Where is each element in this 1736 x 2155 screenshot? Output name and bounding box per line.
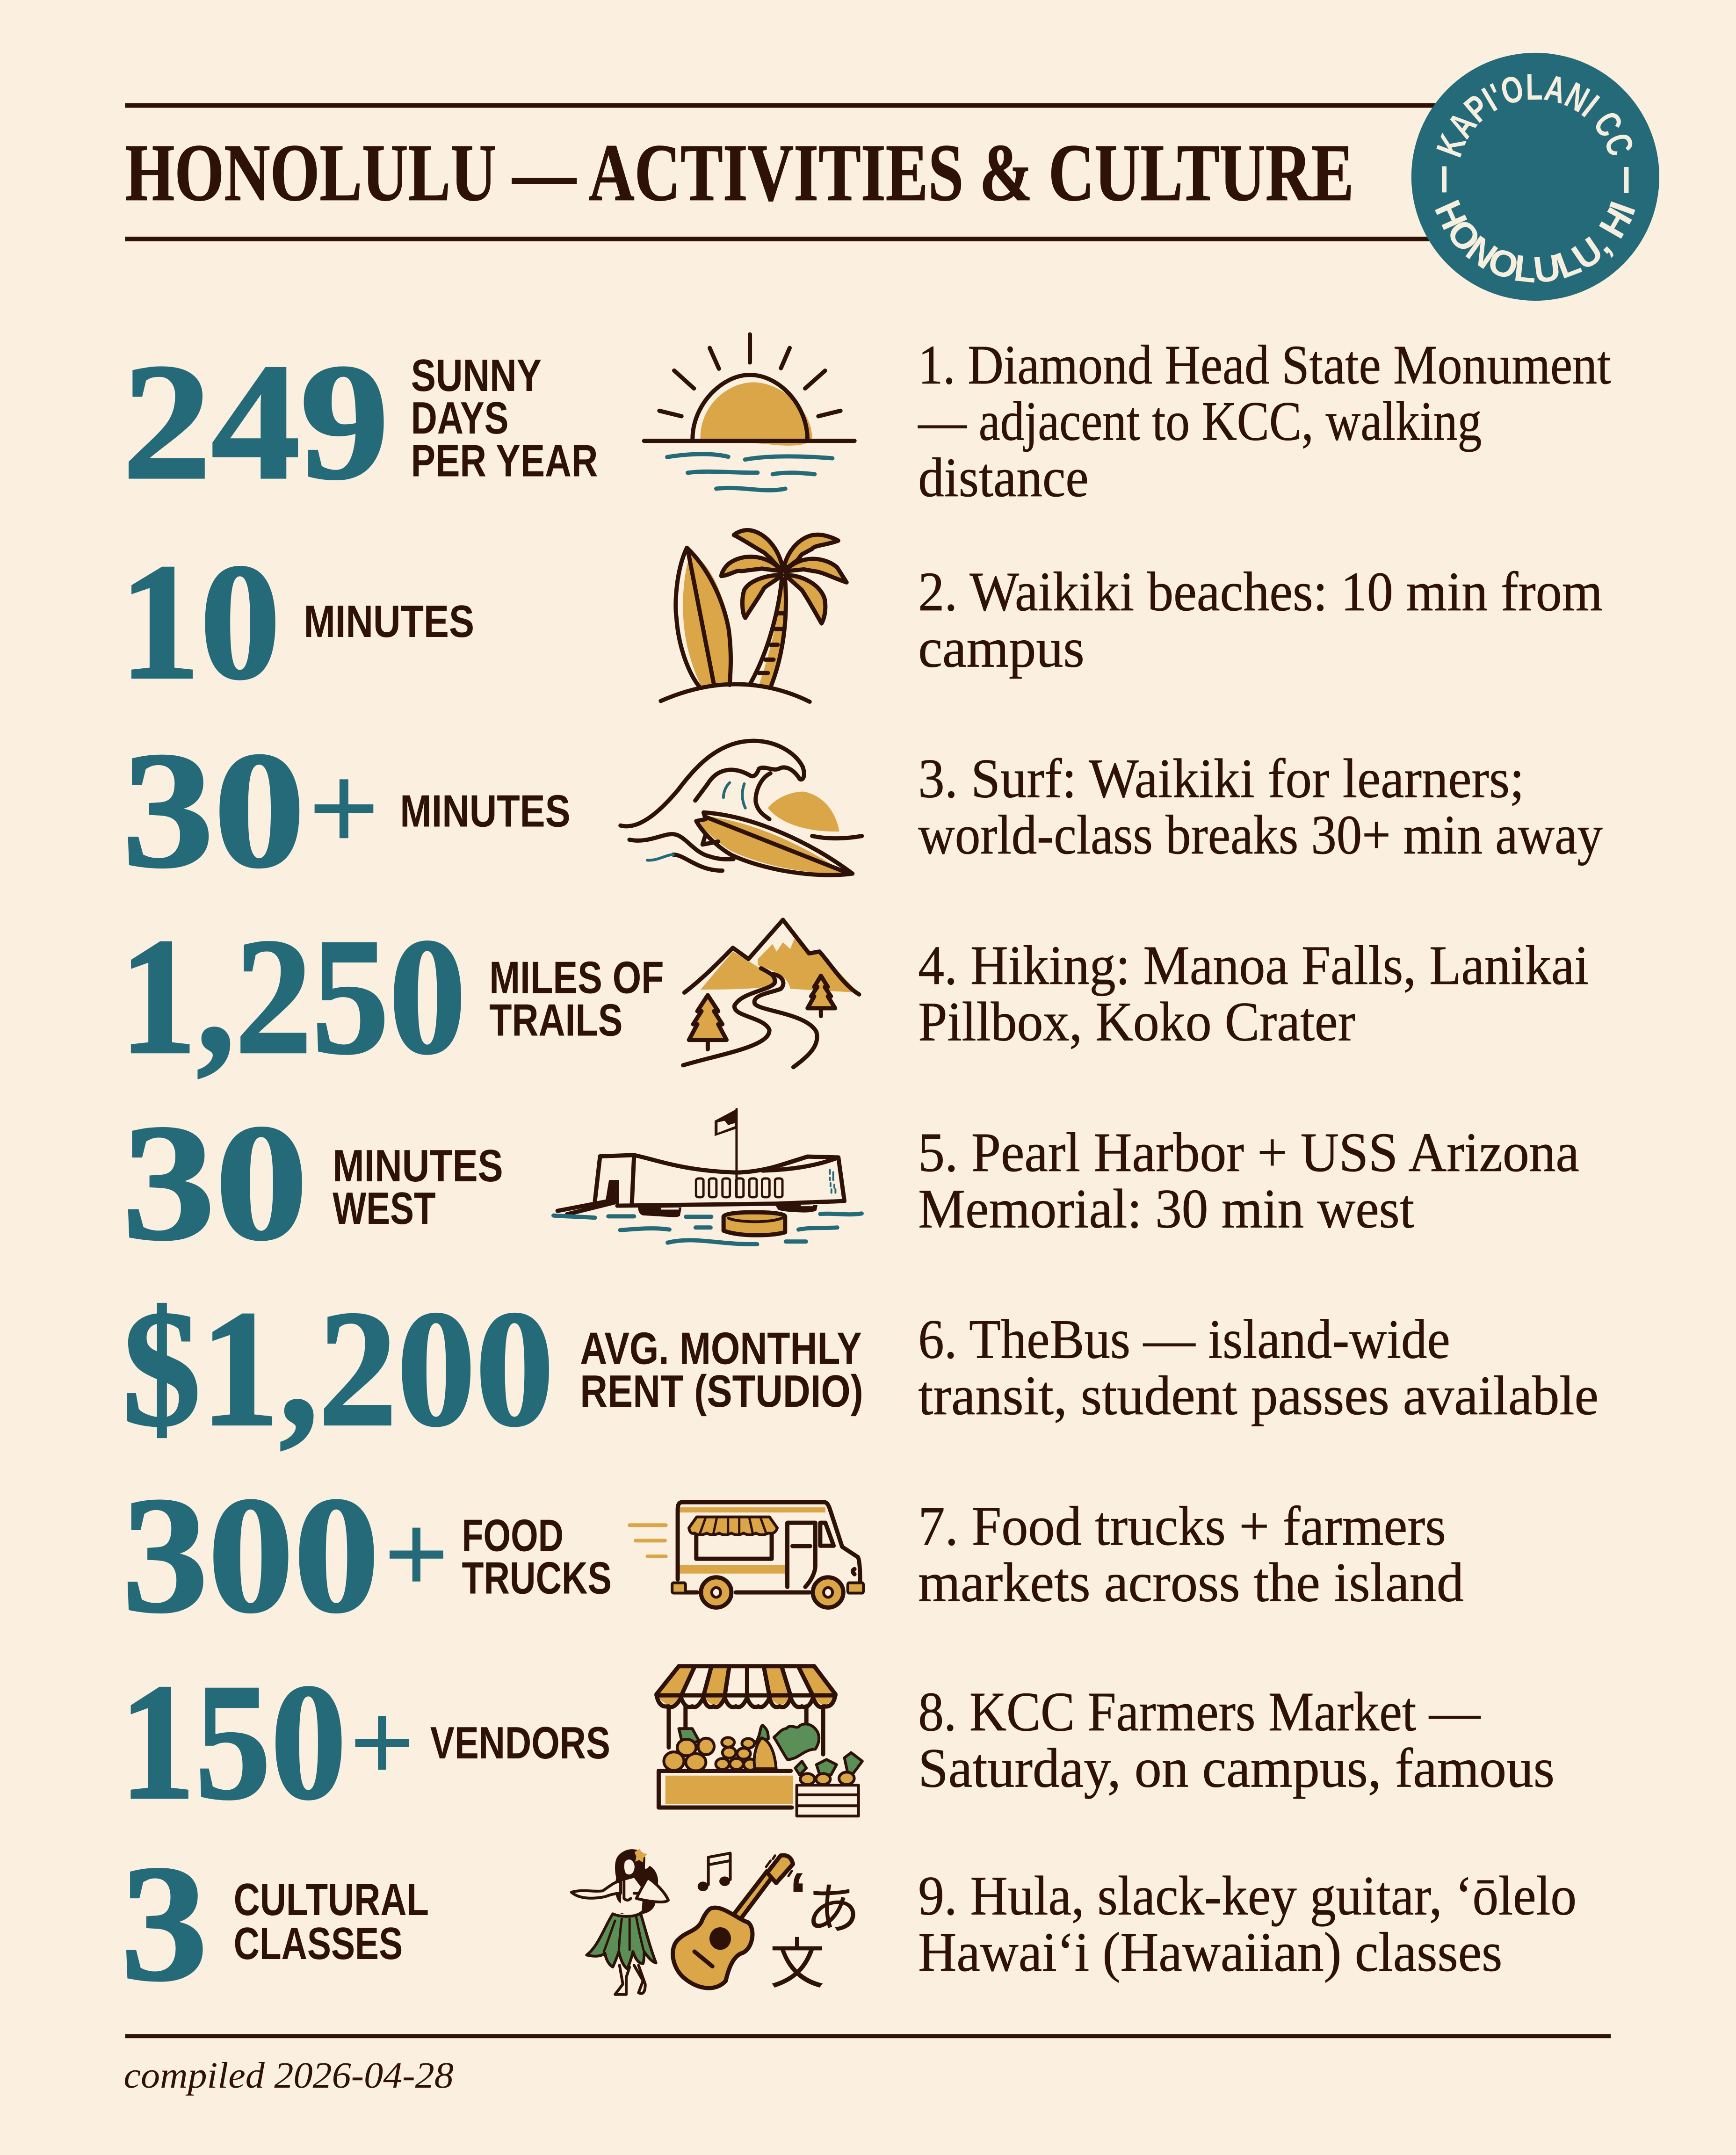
stat label: MINUTES (333, 1140, 503, 1191)
row 2: 10 minutes (120, 530, 1603, 715)
stat number: 30 (123, 719, 305, 903)
stat label: TRAILS (489, 994, 622, 1045)
description: Memorial: 30 min west (918, 1178, 1415, 1240)
icon: language characters: 文 (770, 1935, 825, 1996)
description: 9. Hula, slack-key guitar, ʻōlelo (918, 1865, 1577, 1927)
row 1: 249 sunny days (123, 331, 1612, 515)
row 7: 300+ food trucks (123, 1464, 1464, 1648)
description: campus (918, 617, 1085, 679)
description: transit, student passes available (918, 1365, 1599, 1426)
description: markets across the island (918, 1552, 1464, 1613)
stat label: CULTURAL (234, 1874, 429, 1925)
stat label: TRUCKS (462, 1552, 612, 1603)
stat number: + (308, 738, 380, 878)
icon: hula dancer (571, 1849, 668, 1995)
description: 3. Surf: Waikiki for learners; (918, 748, 1524, 810)
stat number: 300 (123, 1464, 379, 1648)
row 8: 150+ vendors (120, 1650, 1555, 1835)
description (918, 934, 1589, 1053)
stat label: MILES OF (489, 952, 664, 1003)
description (918, 748, 1604, 866)
badge: Kapi'olani CC, Honolulu HI (1411, 53, 1659, 301)
stat number: 1,250 (120, 905, 466, 1089)
badge: Kapi'olani CC, Honolulu HI: KAPI'OLANI CC (1429, 66, 1642, 162)
stat label (234, 1874, 429, 1969)
description: 5. Pearl Harbor + USS Arizona (918, 1121, 1579, 1183)
description (918, 1495, 1464, 1613)
stat label: WEST (333, 1183, 436, 1234)
stat label (580, 1323, 863, 1416)
stat label: RENT (STUDIO) (580, 1366, 863, 1416)
description: 4. Hiking: Manoa Falls, Lanikai (918, 934, 1589, 997)
description (917, 334, 1612, 508)
stat label: SUNNY (411, 350, 542, 401)
row 5: 30 minutes west (123, 1091, 1579, 1275)
icon: farmers market stall (657, 1666, 862, 1816)
stat number: + (349, 1679, 415, 1807)
row 4: 1,250 miles of trails (120, 905, 1589, 1089)
description: — adjacent to KCC, walking (917, 391, 1482, 452)
description: distance (918, 447, 1089, 508)
icon: musical notes (698, 1853, 731, 1891)
stat number: 10 (120, 530, 281, 715)
stat number (123, 719, 380, 903)
description (918, 1309, 1599, 1426)
stat label: PER YEAR (411, 435, 598, 486)
row 3: 30+ minutes (123, 719, 1604, 903)
description: Saturday, on campus, famous (918, 1737, 1555, 1799)
stat label: MINUTES (400, 786, 571, 836)
stat number: 249 (123, 331, 389, 515)
stat number: + (383, 1491, 449, 1619)
stat label (489, 952, 664, 1045)
description (918, 1681, 1555, 1799)
stat number: 150 (120, 1650, 347, 1835)
stat label: FOOD (462, 1510, 564, 1561)
description: 2. Waikiki beaches: 10 min from (918, 561, 1603, 622)
description: Pillbox, Koko Crater (918, 991, 1356, 1053)
icon: slack-key guitar (673, 1855, 793, 1988)
stat label (333, 1140, 503, 1234)
stat number: 3 (121, 1832, 208, 2016)
description (918, 1121, 1579, 1240)
title: HONOLULU — ACTIVITIES & CULTURE (125, 127, 1354, 218)
icon: surfboard and palm tree (661, 530, 846, 701)
icon: language characters: ʻ (789, 1861, 807, 1934)
stat number: $1,200 (123, 1277, 554, 1461)
stat label: DAYS (411, 392, 508, 443)
description: 7. Food trucks + farmers (918, 1495, 1446, 1557)
stat label: MINUTES (304, 596, 474, 647)
row 6: $1,200 rent (123, 1277, 1599, 1461)
stat label (411, 350, 598, 486)
icon: setting sun over water (644, 334, 854, 490)
icon: mountains and winding trail (683, 920, 859, 1067)
description: 1. Diamond Head State Monument (918, 334, 1612, 396)
badge: Kapi'olani CC, Honolulu HI: HONOLULU, HI (1426, 194, 1644, 291)
icon: wave and surfboard (621, 741, 862, 875)
footer: compiled date: compiled 2026-04-28 (124, 2054, 454, 2096)
stat label: CLASSES (234, 1918, 403, 1969)
icon: language characters: あ (805, 1880, 861, 1941)
description: 8. KCC Farmers Market — (918, 1681, 1481, 1743)
row 9: 3 cultural classes (121, 1832, 1577, 2016)
icon: language characters (770, 1861, 861, 1996)
stat number: 30 (123, 1091, 308, 1275)
stat label: VENDORS (430, 1717, 610, 1768)
description: Hawaiʻi (Hawaiian) classes (918, 1921, 1502, 1983)
description: 6. TheBus — island-wide (918, 1309, 1450, 1370)
stat label (462, 1510, 612, 1603)
icon: food truck (629, 1502, 863, 1607)
description (918, 561, 1603, 679)
description: world-class breaks 30+ min away (918, 804, 1604, 866)
icon: USS Arizona Memorial (554, 1109, 861, 1244)
stat label: AVG. MONTHLY (580, 1323, 862, 1374)
description (918, 1865, 1577, 1983)
